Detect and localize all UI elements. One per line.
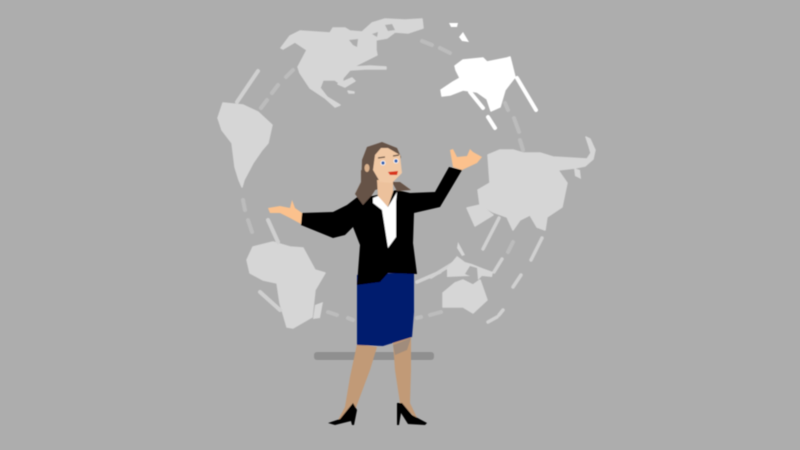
ear	[364, 164, 370, 172]
left hand	[268, 200, 302, 224]
islands: Southeast Asia	[447, 242, 493, 280]
continent: Arabia	[467, 205, 493, 226]
islands: Iceland and Svalbard	[449, 23, 469, 42]
eyebrows	[378, 155, 399, 158]
orbit strokes: Africa	[260, 220, 280, 310]
continent: Africa	[247, 220, 325, 328]
orbit stroke: South America	[237, 71, 258, 102]
continent: North America	[281, 19, 423, 107]
skirt	[357, 272, 414, 346]
floor shadow	[314, 352, 434, 360]
world globe	[218, 19, 595, 328]
hair back	[361, 142, 401, 190]
face	[373, 148, 402, 183]
island: Madagascar	[313, 302, 323, 319]
legs	[337, 336, 418, 422]
orbit strokes: Asia	[417, 218, 542, 322]
hair front	[355, 170, 411, 205]
continent: South America	[218, 103, 272, 187]
right hand	[450, 149, 482, 170]
continent: Asia	[417, 137, 595, 322]
woman figure	[268, 142, 482, 425]
shirt	[373, 192, 397, 248]
neck	[377, 180, 393, 207]
shoes	[328, 403, 427, 425]
jacket with sleeves	[301, 167, 462, 285]
eyes	[380, 158, 398, 166]
bays: North America	[349, 24, 395, 47]
knee shadow	[393, 338, 411, 355]
orbit dashes	[243, 41, 523, 320]
lips	[388, 171, 398, 175]
continent: Europe	[441, 23, 536, 128]
orbit strokes: Europe	[470, 78, 536, 128]
continent: Australia	[443, 280, 487, 313]
